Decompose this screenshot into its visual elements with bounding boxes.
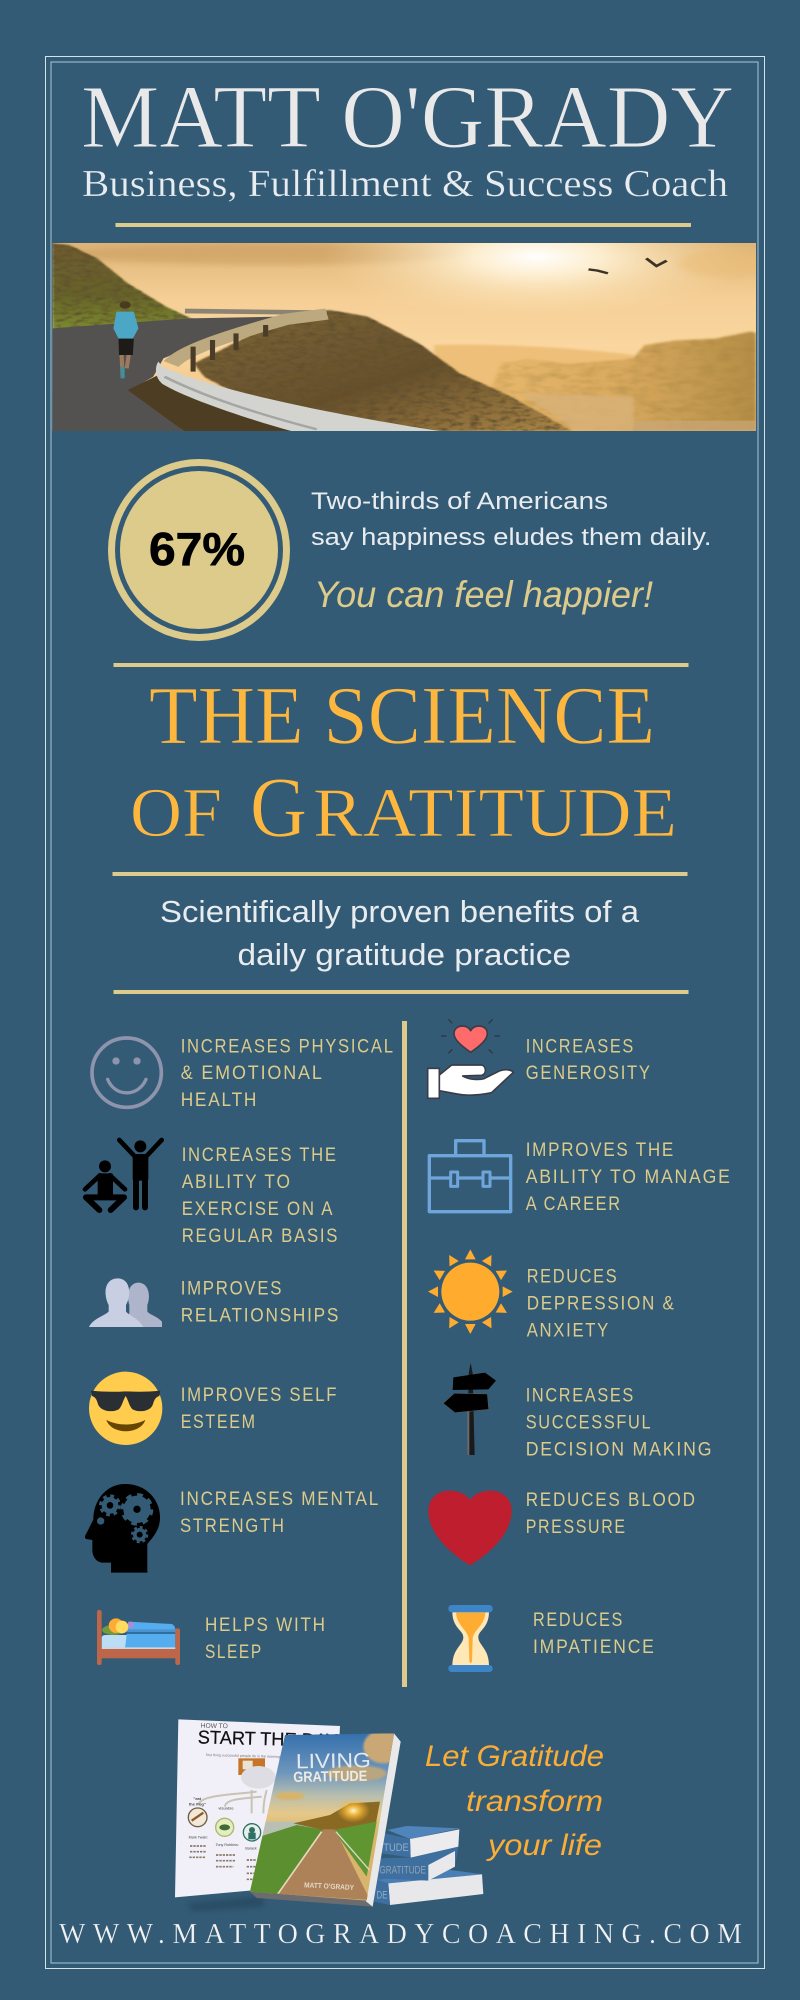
label: GENEROSITY [526,1062,652,1084]
birds [589,258,667,273]
call-out: let gratitude transform your life: your life [486,1829,602,1862]
worksheet: how to start the day: visualize [218,1805,234,1810]
label [526,1139,732,1215]
label: IMPROVES THE [526,1139,675,1161]
label [205,1614,327,1663]
divider below heading [112,872,688,876]
heading: The Science of Gratitude [130,669,677,855]
icon: hourglass [448,1605,493,1672]
benefit: relationships [89,1278,340,1327]
benefit: depression and anxiety [428,1249,676,1342]
subtitle: Business, Fulfillment & Success Coach [82,163,728,205]
label: DEPRESSION & [527,1292,676,1314]
divider under header [116,223,691,227]
stat text: say happiness eludes them daily. [311,524,712,551]
label: INCREASES THE [182,1144,338,1166]
book: Living Gratitude: LIVING [296,1749,371,1773]
stat section [108,459,712,641]
icon: signpost [443,1363,496,1455]
label [182,1144,339,1247]
worksheet: how to start the day: "eat [193,1796,202,1801]
book: Living Gratitude: GRATITUDE [293,1769,368,1786]
stat text: Two-thirds of Americans [311,488,608,515]
call-out: let gratitude transform your life: transform [466,1785,603,1818]
label [526,1384,713,1460]
label: ESTEEM [181,1411,257,1433]
happier call-out: You can feel happier! [314,574,653,615]
label: PRESSURE [526,1516,627,1538]
label: DECISION MAKING [526,1438,713,1460]
icon: smiley [92,1038,161,1107]
label: INCREASES PHYSICAL [181,1036,395,1058]
icon: person in bed [97,1610,180,1665]
icon: two exercising people [85,1140,162,1210]
heading: The Science of Gratitude: OF [130,775,222,852]
label [181,1036,395,1111]
label: INCREASES [526,1036,635,1058]
label [526,1036,652,1084]
label: ABILITY TO [182,1171,292,1193]
column divider [402,1021,407,1687]
worksheet: how to start the day [175,1719,340,1912]
label: IMPROVES [181,1278,283,1300]
label: ANXIETY [527,1320,610,1342]
label: RELATIONSHIPS [181,1304,340,1326]
icon: sunglasses emoji [89,1372,162,1445]
label: REGULAR BASIS [182,1225,339,1247]
book stack: DE [377,1889,387,1901]
icon: heart over open hand [428,1019,513,1098]
worksheet: how to start the day: HOW TO [201,1723,228,1730]
icon: red heart [428,1491,512,1565]
book stack: GRATITUDE [379,1864,426,1876]
call-out: let gratitude transform your life: Let Gratitude [425,1740,604,1773]
title: MATT O'GRADY [81,68,734,167]
heading: The Science of Gratitude: G [250,759,307,855]
benefit: physical and emotional health [92,1036,395,1111]
benefit: mental strength [85,1484,380,1573]
label: INCREASES MENTAL [180,1488,380,1510]
label: IMPATIENCE [533,1636,656,1658]
stat text [311,488,712,551]
website address: WWW.MATTOGRADYCOACHING.COM [59,1919,742,1950]
label: IMPROVES SELF [181,1384,338,1406]
intro text: daily gratitude practice [238,937,571,972]
heading: The Science of Gratitude: THE SCIENCE [149,669,655,761]
icon: two people silhouettes [89,1278,162,1327]
label: HEALTH [181,1089,258,1111]
book: Living Gratitude [247,1730,403,1907]
book and worksheet artwork [175,1719,483,1912]
worksheet: how to start the day: START THE DAY [198,1726,339,1751]
label: HELPS WITH [205,1614,327,1636]
heading: The Science of Gratitude: RATITUDE [313,775,677,852]
67% badge [108,459,290,641]
label [180,1488,380,1537]
icon: briefcase [429,1141,511,1212]
worksheet: how to start the day: Mark Twain: [189,1835,208,1839]
book: Living Gratitude: MATT O'GRADY [304,1880,354,1892]
photo: runner on coastal road at sunset [52,243,756,431]
label: ABILITY TO MANAGE [526,1166,732,1188]
label [527,1266,676,1342]
label: A CAREER [526,1193,622,1215]
worksheet: how to start the day: Barack [245,1846,257,1850]
label: REDUCES [527,1266,618,1288]
benefit: exercise [85,1140,339,1247]
label: INCREASES [526,1384,635,1406]
benefit: self esteem [89,1372,338,1445]
label: SUCCESSFUL [526,1412,652,1434]
intro text: Scientifically proven benefits of a [160,894,640,929]
label [181,1384,338,1433]
benefit: decision making [443,1363,713,1460]
label [526,1489,697,1538]
label [533,1609,656,1658]
label: SLEEP [205,1641,263,1663]
book stack [374,1826,483,1905]
label: EXERCISE ON A [182,1198,334,1220]
runner [113,301,138,378]
worksheet: how to start the day: Tony Robbins: [216,1843,239,1847]
67% badge: 67% [149,523,245,575]
benefit: generosity [428,1019,652,1098]
label: REDUCES BLOOD [526,1489,697,1511]
label: STRENGTH [180,1515,286,1537]
benefit: impatience [448,1605,656,1672]
icon: sun [428,1249,513,1334]
divider above heading [114,663,688,667]
label: REDUCES [533,1609,624,1631]
worksheet: how to start the day: the frog" [189,1802,206,1807]
call-out: let gratitude transform your life [425,1740,604,1862]
label: & EMOTIONAL [181,1062,324,1084]
benefit: sleep [97,1610,327,1665]
benefit: blood pressure [428,1489,697,1565]
divider above benefits [114,990,688,994]
label [181,1278,340,1326]
benefit: career [429,1139,732,1215]
intro text [160,894,640,972]
worksheet: how to start the day: first thing successful people do in the morning [206,1753,280,1759]
icon: head with gears [85,1484,160,1573]
header: name and tagline [81,68,734,205]
book stack: TUDE [383,1842,409,1854]
